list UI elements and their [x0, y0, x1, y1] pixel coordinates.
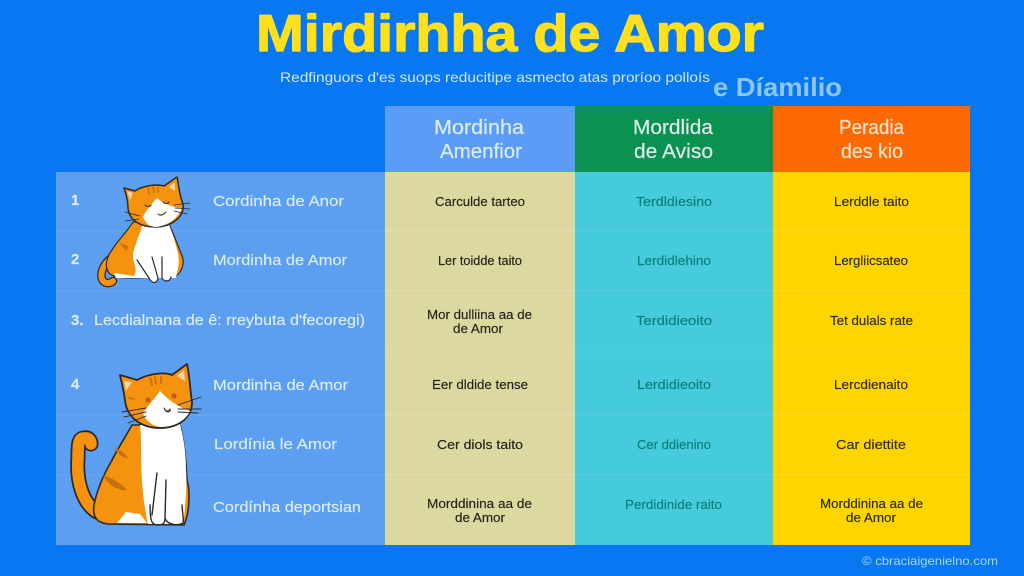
- column one cells: Eer dldide tense: [432, 377, 528, 392]
- column header: Peradia des kio: Peradia: [839, 117, 905, 139]
- column one cells: Morddinina aa de: [427, 496, 532, 511]
- column one cells: Cer diols taito: [437, 437, 523, 452]
- column one cells: de Amor: [455, 510, 506, 525]
- column three cells: Morddinina aa de: [820, 496, 923, 511]
- row label: 2: Mordinha de Amor: [213, 252, 347, 269]
- column header: Peradia des kio: des kio: [841, 141, 903, 163]
- subtitle accent: e Díamilio: [713, 72, 842, 102]
- column header: Mordlida de Aviso: Mordlida: [633, 117, 714, 139]
- comparison table: [56, 106, 970, 545]
- column one cells: de Amor: [453, 321, 504, 336]
- column three cells: de Amor: [846, 510, 897, 525]
- column two cells: Cer ddienino: [637, 437, 711, 452]
- row numbers: 2: [71, 251, 79, 268]
- column header: Mordinha Amenfior: Mordinha: [434, 117, 525, 139]
- column header: Peradia des kio: [773, 106, 970, 172]
- column header: Mordinha Amenfior: Amenfior: [440, 141, 522, 163]
- row numbers: [71, 192, 84, 393]
- column two cells: Terdidieoito: [636, 313, 712, 328]
- column one cells: Mor dulliina aa de: [427, 307, 532, 322]
- icon: large orange cat: [78, 364, 201, 525]
- row label: 5: Lordínia le Amor: [214, 436, 337, 453]
- column one cells: [385, 172, 575, 545]
- title: Mirdirhha de Amor: [256, 5, 764, 63]
- row numbers: 4: [71, 376, 80, 393]
- row label: 3: Lecdialnana de ê: rreybuta d'fecoregi): [94, 312, 365, 329]
- row numbers: 3.: [71, 312, 84, 329]
- column header: Mordlida de Aviso: de Aviso: [634, 141, 713, 163]
- column three cells: [773, 172, 970, 545]
- panel: row labels: [56, 172, 385, 545]
- column three cells: Tet dulals rate: [830, 313, 913, 328]
- column header: Mordlida de Aviso: [575, 106, 773, 172]
- subtitle: Redfinguors d'es suops reducitipe asmecto atas proríoo polloís: [280, 69, 710, 85]
- column header: Mordinha Amenfior: [385, 106, 575, 172]
- column two cells: Perdidinide raito: [625, 497, 722, 512]
- icon: small orange cat: [101, 177, 190, 283]
- column one cells: Carculde tarteo: [435, 194, 525, 209]
- column two cells: Terdldiesino: [636, 194, 712, 209]
- column one cells: Ler toidde taito: [438, 253, 522, 268]
- footer credit: © cbraciaigenielno.com: [862, 554, 998, 568]
- row numbers: 1: [71, 192, 79, 209]
- column three cells: Lergliicsateo: [834, 253, 908, 268]
- column three cells: Lerddle taito: [834, 194, 909, 209]
- column two cells: Lerdidieoito: [637, 377, 711, 392]
- column two cells: [575, 172, 773, 545]
- row label: 6: Cordínha deportsian: [213, 499, 361, 516]
- column two cells: Lerdidlehino: [637, 253, 711, 268]
- column three cells: Lercdienaito: [834, 377, 908, 392]
- row label: 1: Cordinha de Anor: [213, 193, 344, 210]
- row label: 4: Mordinha de Amor: [213, 377, 348, 394]
- column three cells: Car diettite: [836, 437, 906, 452]
